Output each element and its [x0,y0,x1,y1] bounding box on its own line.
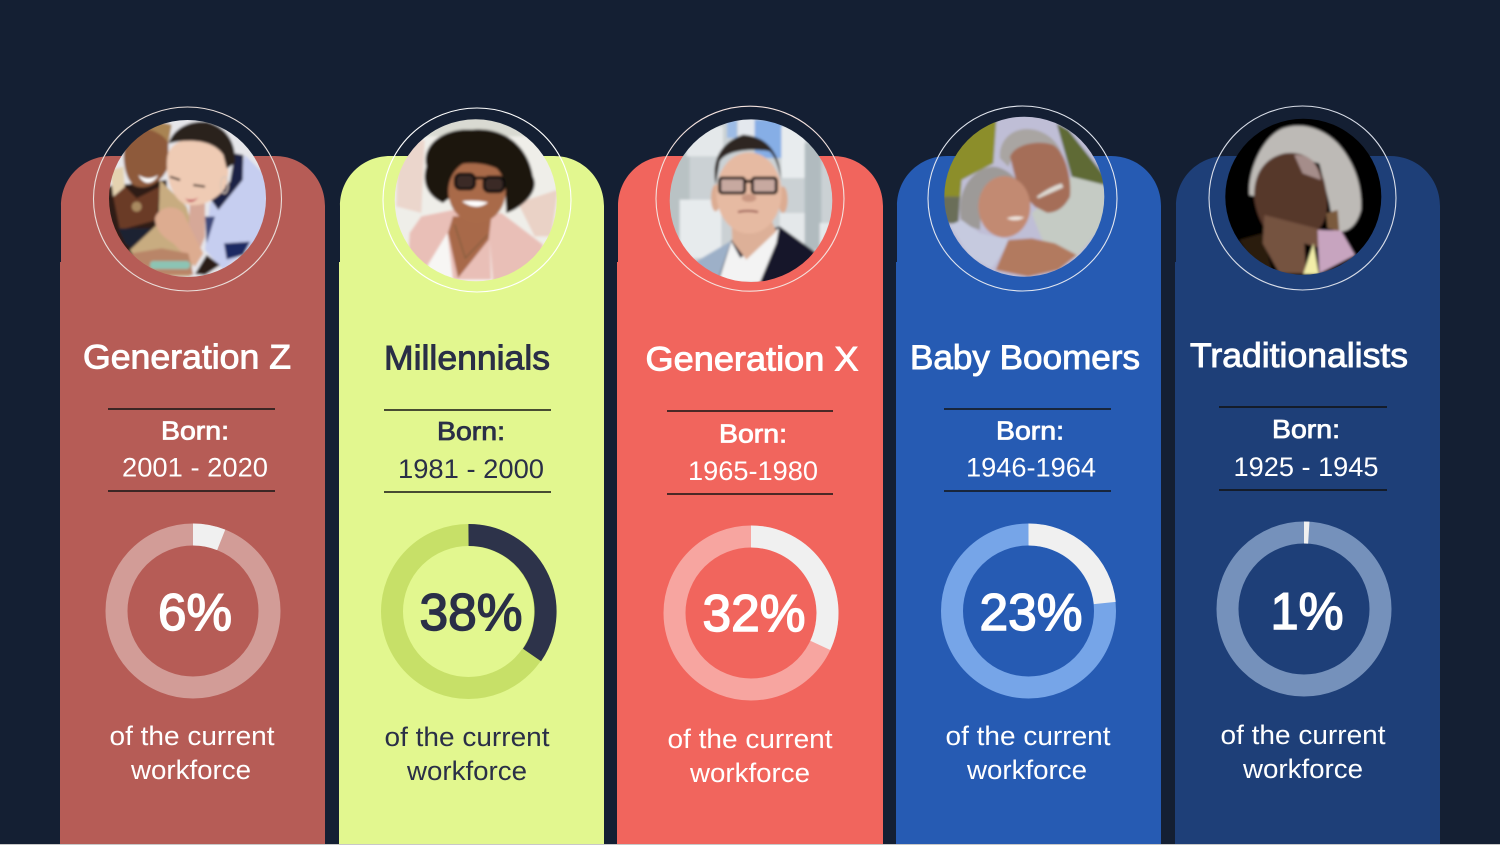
card shape [1175,156,1440,845]
photo outline ring [1209,106,1396,290]
card shape [617,156,883,845]
heading: Millennials [384,340,550,378]
caption: workforce [966,755,1087,785]
born years block [1219,407,1387,490]
caption [110,721,275,785]
donut chart: 38%: 38% [420,584,522,642]
panel: Generation X [617,106,883,845]
born years block: 1981 - 2000 [398,454,544,484]
heading: Generation X [646,340,858,378]
caption: workforce [689,758,810,788]
caption: of the current [668,724,833,754]
donut chart: 6%: 6% [158,584,232,642]
heading: Baby Boomers [910,339,1140,377]
caption: of the current [384,722,550,752]
heading: Generation Z [83,338,291,376]
card shape [339,156,604,845]
caption: workforce [1242,754,1363,784]
caption: of the current [1220,720,1386,750]
photo outline ring [383,108,571,292]
photo outline ring [928,106,1117,291]
caption: workforce [130,755,251,785]
born years block: Born: [161,416,229,446]
card shape [896,156,1161,845]
panel: Generation Z [60,107,325,845]
born years block: Born: [996,416,1064,446]
caption: workforce [406,756,527,786]
donut chart: 1%: 1% [1270,583,1344,641]
born years block: Born: [1272,414,1340,444]
donut chart: 32% [674,536,828,690]
donut chart: 23% [952,534,1105,688]
donut chart: 38% [392,535,546,688]
born years block [944,409,1111,491]
panel: Traditionalists [1175,106,1440,845]
photo outline ring [656,106,844,291]
born years block: 1925 - 1945 [1234,452,1378,482]
born years block [667,411,833,494]
heading: Traditionalists [1190,337,1408,375]
caption [668,724,833,788]
photo: woman with glasses and pink blazer [394,119,557,282]
photo: elderly couple embracing [944,116,1104,277]
donut chart: 1% [1228,532,1380,686]
born years block [108,409,275,491]
born years block: Born: [437,416,505,446]
donut chart: 6% [116,534,270,688]
photo: two young women looking at a phone [109,120,266,277]
photo outline ring [94,107,282,291]
panel: Millennials [339,108,604,845]
born years block: 1946-1964 [966,452,1096,482]
born years block: 1965-1980 [688,456,818,486]
caption: of the current [946,721,1111,751]
card shape [60,156,325,845]
caption [1220,720,1386,784]
caption [946,721,1111,785]
born years block [384,410,551,492]
donut chart: 23%: 23% [980,584,1082,642]
photo: man with glasses in a dark blazer [666,116,836,290]
donut chart: 32%: 32% [702,585,806,643]
born years block: 2001 - 2020 [122,452,268,482]
caption [384,722,550,786]
panel: Baby Boomers [896,106,1161,845]
photo: elderly woman with white hair on black [1225,118,1382,275]
caption: of the current [110,721,275,751]
born years block: Born: [719,418,787,448]
